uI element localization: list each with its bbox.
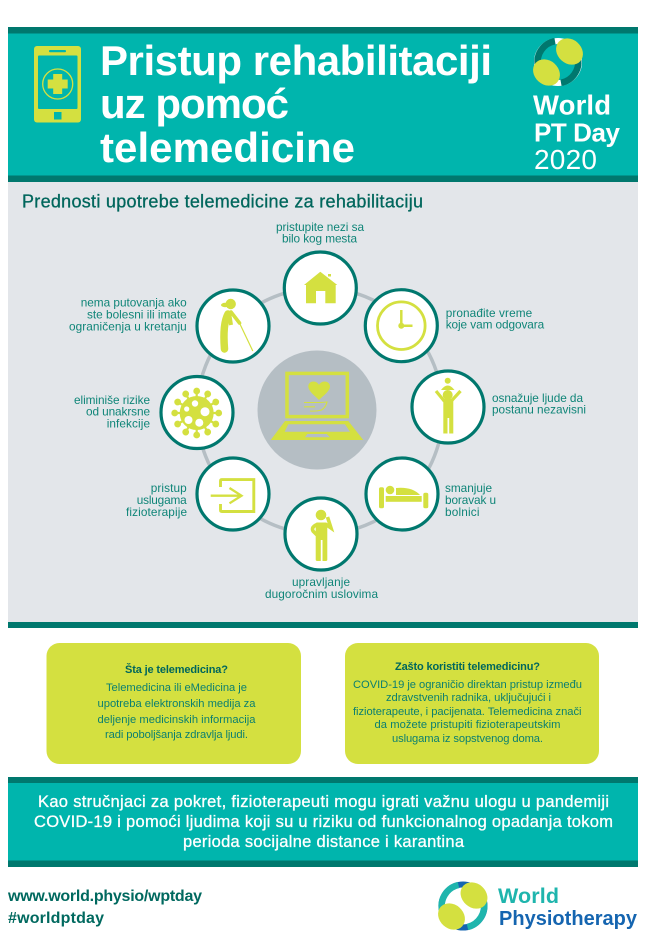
header banner [8,27,638,182]
icon: smartphone with medical cross [34,46,81,122]
label: enter arrow: pristup [151,481,187,495]
label: home: pristupite nezi sa [276,220,364,234]
callout: what is telemedicine: upotreba elektronskih medija za [98,698,256,710]
label: virus: eliminiše rizike [74,393,150,407]
callout: what is telemedicine [46,643,301,764]
label: enter arrow [126,481,187,519]
callout: why use telemedicine [345,643,599,764]
panel heading: Prednosti upotrebe telemedicine za rehabilitaciju [22,192,423,212]
label: enter arrow: fizioterapije [126,505,187,519]
label: home: bilo kog mesta [282,232,357,246]
logo wordmark: World [533,90,611,120]
footer links: www.world.physio/wptday [7,888,202,905]
item: older person with cane [197,290,269,362]
label: older person with cane: ograničenja u kretanju [69,320,187,334]
logo: World PT Day 2020 [528,33,621,175]
callout: what is telemedicine: deljenje medicinskih informacija [98,714,256,726]
label: hospital bed: bolnici [445,505,480,519]
banner: closing message: perioda socijalne distance i karantina [183,833,465,851]
logo mark [528,33,588,91]
label: older person with cane: nema putovanja ako [81,296,187,310]
callout: why use telemedicine: fizioterapeute, i pacijenata. Telemedicina znači [353,706,582,718]
label: older person with cane [69,296,187,334]
item: virus [161,376,233,448]
footer links [7,888,202,927]
item: person with long-term condition [285,498,357,570]
label: virus [74,393,150,430]
callout: why use telemedicine: Zašto koristiti telemedicinu? [395,661,540,673]
label: parent lifting child [492,391,586,416]
banner: closing message: COVID-19 i pomoći ljudima koji su u riziku od funkcionalnog opadanja tokom [34,813,613,831]
label: enter arrow: uslugama [137,493,187,507]
footer links: #worldptday [8,910,104,927]
label: clock: koje vam odgovara [446,318,545,332]
item: home [284,252,356,324]
callout: why use telemedicine: zdravstvenih radnika, uključujući i [386,692,551,704]
label: clock [446,306,545,332]
label: hospital bed [445,481,496,519]
title: Pristup rehabilitaciji [100,37,492,84]
item: enter arrow [197,458,269,530]
callout: what is telemedicine: radi poboljšanja zdravlja ljudi. [105,729,248,741]
panel: benefits of telemedicine [8,182,638,628]
label: older person with cane: ste bolesni ili imate [87,308,187,322]
callout: why use telemedicine: da možete pristupiti fizioterapeutskim [374,719,560,731]
callout: what is telemedicine: Šta je telemedicina? [125,663,228,676]
item: clock [365,290,437,362]
connecting ring [197,288,443,534]
logo: World Physiotherapy [433,877,638,935]
label: parent lifting child: osnažuje ljude da [492,391,583,405]
central circle with laptop [258,350,376,470]
label: person with long-term condition [265,575,378,601]
label: virus: infekcije [107,416,150,430]
logo mark [433,877,493,935]
callout: why use telemedicine: uslugama iz sopstvenog doma. [392,733,543,745]
logo wordmark: PT Day [534,118,621,148]
title: telemedicine [100,124,355,171]
label: person with long-term condition: dugoročnim uslovima [265,587,378,601]
label: virus: od unakrsne [86,405,150,419]
label: hospital bed: smanjuje [445,481,492,495]
label: home [276,220,364,246]
banner: closing message: Kao stručnjaci za pokret, fizioterapeuti mogu igrati važnu ulogu u pandemiji [38,793,609,811]
title: uz pomoć [100,80,289,127]
label: parent lifting child: postanu nezavisni [492,402,586,416]
logo wordmark: World [498,884,559,908]
item: parent lifting child [412,371,484,443]
label: person with long-term condition: upravljanje [292,575,350,589]
label: clock: pronađite vreme [446,306,533,320]
logo wordmark: 2020 [534,144,597,175]
logo wordmark: Physiotherapy [499,908,638,930]
callout: what is telemedicine: Telemedicina ili eMedicina je [106,682,247,694]
logo wordmark [533,90,621,175]
item: hospital bed [366,458,438,530]
banner: closing message [8,777,638,867]
label: hospital bed: boravak u [445,493,496,507]
title [100,37,492,171]
callout: why use telemedicine: COVID-19 je ograničio direktan pristup između [353,679,582,691]
logo wordmark [498,884,638,930]
